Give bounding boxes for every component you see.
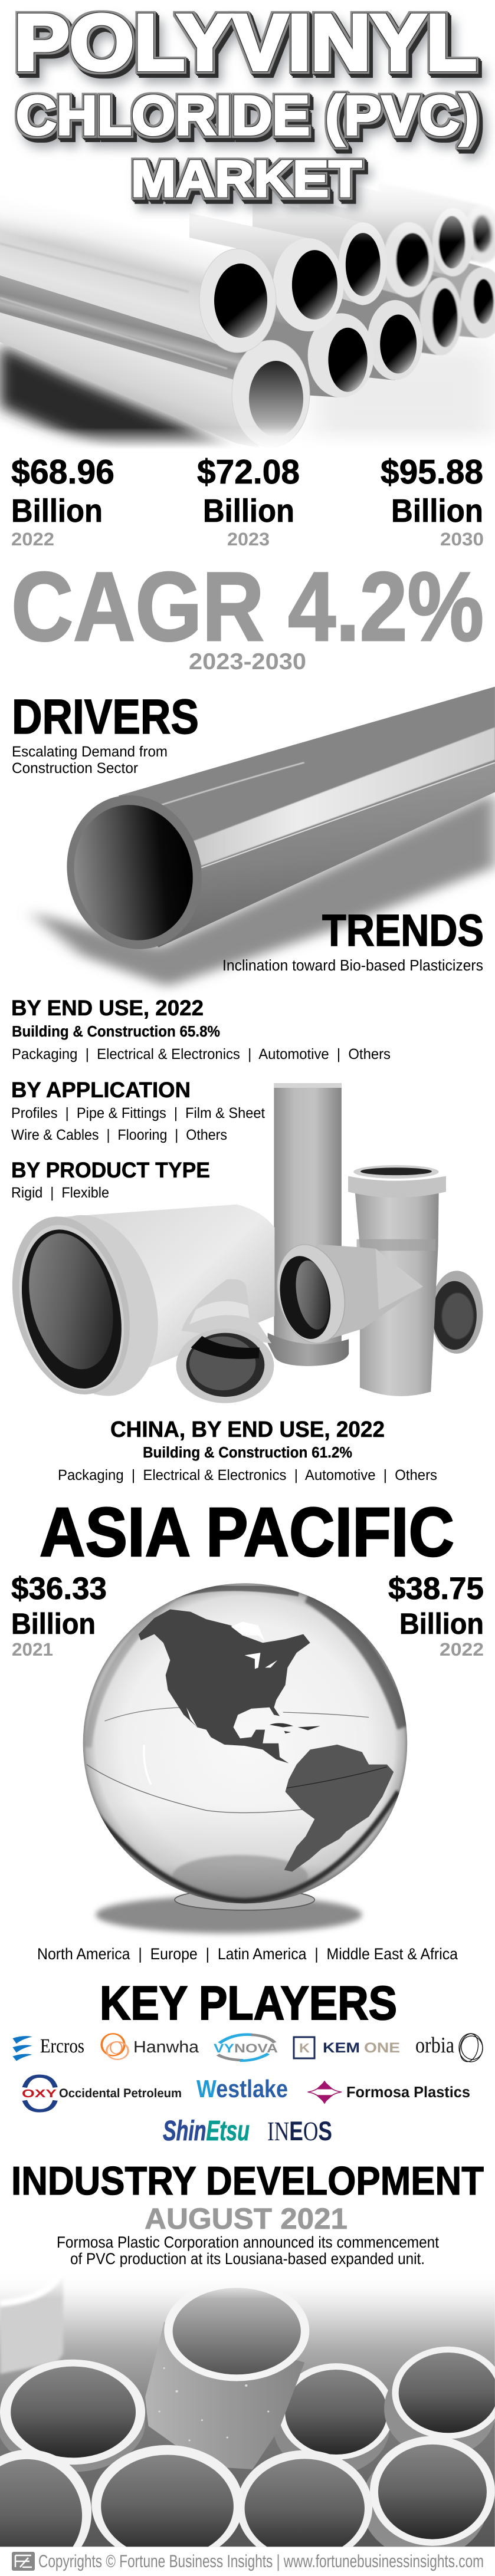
stat 2022 — [11, 453, 114, 550]
China by end use: CHINA, BY END USE, 2022 — [110, 1417, 385, 1442]
logo: Westlake: Westlake — [196, 2075, 288, 2103]
logo: Kem One: KEM — [323, 2040, 360, 2056]
regions list: North America | Europe | Latin America | Middle East & Africa — [37, 1945, 458, 1963]
hero image: stacked pipes — [0, 177, 495, 457]
stat 2023: 2023 — [227, 529, 270, 550]
Asia Pacific 2022 value: 2022 — [440, 1639, 484, 1660]
tall pipe — [268, 1083, 349, 1366]
CAGR: 2023-2030 — [189, 649, 306, 675]
logo: Vynova — [214, 2035, 278, 2061]
Asia Pacific 2021 value — [11, 1571, 107, 1660]
pipe ring: bottom centre — [91, 2445, 241, 2547]
China by end use: Building & Construction 61.2% — [143, 1443, 352, 1461]
pipe ring: right middle — [273, 2363, 394, 2475]
drivers: Construction Sector — [12, 760, 138, 777]
stat 2030 — [381, 453, 484, 550]
China by end use — [58, 1417, 437, 1483]
title line 1: POLYVINYL — [14, 0, 477, 87]
trends — [222, 906, 484, 974]
Asia Pacific 2021 value: Billion — [11, 1607, 96, 1640]
by end use — [11, 996, 391, 1062]
stat 2022: Billion — [11, 492, 103, 529]
stat 2023: $72.08 — [197, 453, 300, 491]
logo: Formosa Plastics: Formosa Plastics — [346, 2083, 470, 2101]
small rear socket — [431, 1271, 483, 1354]
industry development — [11, 2159, 484, 2268]
map: South America — [284, 1745, 394, 1871]
heading: key players: KEY PLAYERS — [100, 1977, 397, 2030]
market size stats — [11, 453, 484, 550]
stat 2030: $95.88 — [381, 453, 483, 491]
industry development: of PVC production at its Lousiana-based expanded unit. — [70, 2250, 425, 2268]
key player logos — [12, 2032, 486, 2147]
stat 2022: 2022 — [11, 529, 54, 550]
title line 3: MARKET — [131, 150, 362, 208]
logo: Vynova: VY NOVA — [214, 2042, 278, 2055]
pipe image — [30, 687, 495, 986]
stat 2023: Billion — [203, 492, 294, 529]
title line 2: CHLORIDE (PVC) — [16, 84, 478, 146]
logo: Shin-Etsu: ShinEtsu — [163, 2116, 250, 2147]
logo: Hanwha: Hanwha — [133, 2038, 199, 2056]
logo: Occidental Petroleum — [22, 2076, 182, 2111]
by end use: BY END USE, 2022 — [11, 996, 204, 1020]
map: Hudson Bay and lakes — [186, 1622, 277, 1727]
by product type: Rigid | Flexible — [11, 1185, 109, 1201]
logo: Kem One: ONE — [364, 2040, 400, 2056]
pipe ring: lower right — [366, 2436, 495, 2547]
Asia Pacific 2021 value: 2021 — [12, 1639, 53, 1660]
logo: Kem One: K — [299, 2041, 310, 2055]
map: North America — [139, 1609, 310, 1763]
logo: Hanwha — [101, 2034, 199, 2060]
China by end use: Packaging | Electrical & Electronics | Automotive | Others — [58, 1467, 437, 1483]
drivers: Escalating Demand from — [12, 743, 168, 760]
T fitting — [270, 1165, 446, 1396]
pipe ring: left — [0, 2360, 145, 2472]
by application: BY APPLICATION — [11, 1078, 191, 1102]
logo: Kem One — [294, 2037, 400, 2058]
Asia Pacific 2022 value: $38.75 — [388, 1571, 484, 1606]
by product type: BY PRODUCT TYPE — [11, 1158, 210, 1182]
by application: Profiles | Pipe & Fittings | Film & Sheet — [11, 1105, 265, 1121]
by end use: Packaging | Electrical & Electronics | Automotive | Others — [12, 1046, 391, 1062]
by application — [11, 1078, 265, 1143]
logo: Occidental Petroleum: OXY — [22, 2088, 57, 2100]
title — [14, 0, 478, 208]
logo: Formosa Plastics — [308, 2081, 470, 2103]
image: pipe fittings — [0, 1083, 483, 1403]
pipe ring: bottom centre right — [240, 2450, 373, 2547]
bottom image: pipe ends — [0, 2267, 495, 2575]
logo: Orbia — [415, 2032, 486, 2064]
pipe ring: right upper — [384, 2347, 495, 2457]
Asia Pacific 2022 value: Billion — [399, 1607, 484, 1640]
elbow fitting — [176, 1279, 274, 1403]
stat 2022: $68.96 — [11, 453, 114, 491]
by application: Wire & Cables | Flooring | Others — [11, 1127, 227, 1143]
logo: Ercros: Ercros — [40, 2035, 84, 2057]
by end use: Building & Construction 65.8% — [12, 1022, 220, 1040]
back pipes — [189, 182, 495, 397]
logo: INEOS: INEOS — [267, 2116, 332, 2146]
trends: Inclination toward Bio-based Plasticizers — [222, 956, 483, 974]
stat 2023 — [197, 453, 300, 550]
logo: Orbia: orbia — [415, 2033, 454, 2058]
by product type — [11, 1158, 210, 1201]
stat 2030: 2030 — [440, 529, 484, 550]
large socket pipe — [0, 1205, 274, 1401]
drivers: DRIVERS — [12, 689, 199, 744]
Asia Pacific 2022 value — [388, 1571, 484, 1660]
logo: Occidental Petroleum: Occidental Petroleum — [59, 2087, 182, 2100]
industry development: AUGUST 2021 — [145, 2202, 348, 2235]
pipe: tilted centre tube — [145, 2280, 309, 2469]
drivers — [12, 689, 199, 777]
heading: Asia Pacific: ASIA PACIFIC — [40, 1493, 454, 1571]
Asia Pacific 2021 value: $36.33 — [11, 1571, 107, 1606]
pipe ring: bottom left — [0, 2450, 92, 2547]
icon: Fortune Business Insights logo — [12, 2552, 35, 2571]
industry development: Formosa Plastic Corporation announced its commencement — [57, 2233, 439, 2251]
logo: Ercros — [12, 2035, 84, 2061]
map: Caribbean — [270, 1723, 320, 1733]
globe — [71, 1583, 425, 1933]
stat 2030: Billion — [391, 492, 483, 529]
front pipes — [0, 214, 310, 448]
